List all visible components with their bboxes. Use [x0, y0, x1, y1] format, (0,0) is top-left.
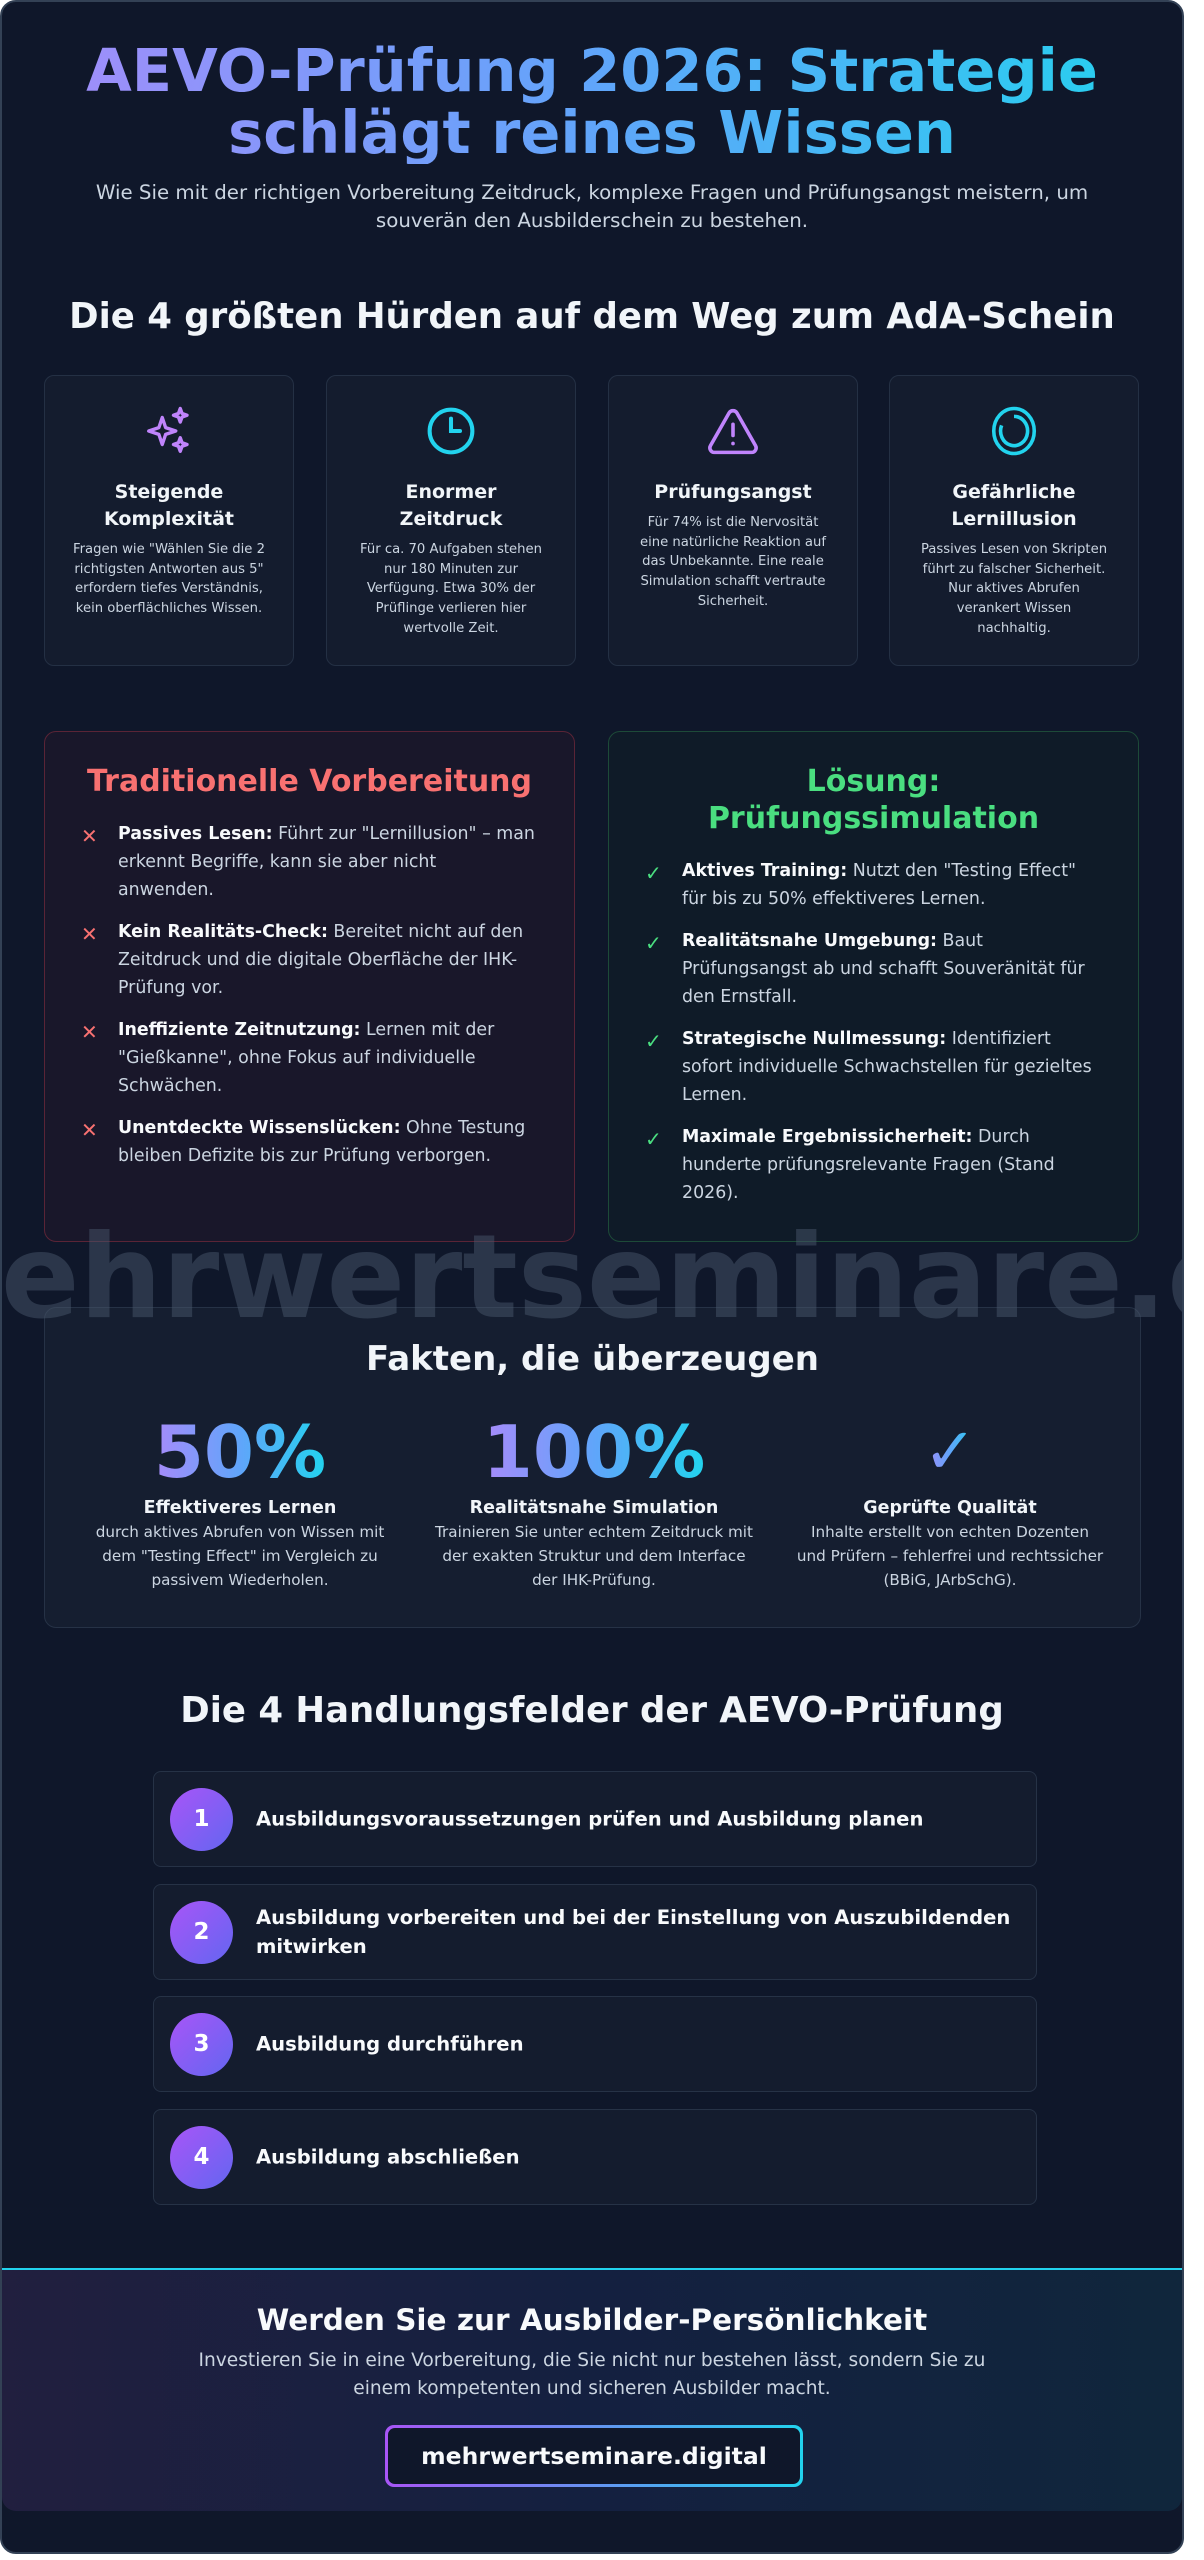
heading: facts: Fakten, die überzeugen	[366, 1339, 819, 1379]
item: passive reading: Passives Lesen: Führt zur "Lernillusion" – man erkennt Begriffe, kann sie aber nicht anwenden.	[118, 824, 535, 900]
fact: 50%: 50%	[154, 1410, 326, 1494]
field 3: Ausbildung durchführen	[256, 2032, 524, 2056]
CTA text: Investieren Sie in eine Vorbereitung, die Sie nicht nur bestehen lässt, sondern Sie zu einem kompetenten und sicheren Ausbilder macht.	[199, 2350, 985, 2399]
card: time pressure: Enormer Zeitdruck	[400, 481, 502, 530]
card: learning illusion	[889, 375, 1139, 666]
heading: traditional: Traditionelle Vorbereitung	[87, 764, 532, 799]
item: realistic environment: Realitätsnahe Umgebung: Baut Prüfungsangst ab und schafft Souveränität für den Ernstfall.	[682, 931, 1085, 1007]
item: inefficient time: Ineffiziente Zeitnutzung: Lernen mit der "Gießkanne", ohne Fokus auf individuelle Schwächen.	[118, 1020, 494, 1096]
subtitle: Wie Sie mit der richtigen Vorbereitung Zeitdruck, komplexe Fragen und Prüfungsangst meistern, um souverän den Ausbilderschein zu bestehen.	[96, 181, 1088, 232]
fact: quality	[797, 1415, 1104, 1589]
panel: solution	[608, 731, 1139, 1242]
heading: hurdles: Die 4 größten Hürden auf dem Weg zum AdA-Schein	[69, 296, 1115, 337]
item: no reality check: ✕	[81, 922, 98, 946]
field 1: Ausbildungsvoraussetzungen prüfen und Ausbildung planen	[256, 1808, 923, 1830]
field 3	[153, 1996, 1037, 2092]
field 4: Ausbildung abschließen	[256, 2146, 520, 2168]
card: learning illusion: Passives Lesen von Skripten führt zu falscher Sicherheit. Nur aktives Abrufen verankert Wissen nachhaltig.	[921, 542, 1107, 636]
field 2: 2	[193, 1919, 210, 1945]
title: AEVO-Prüfung 2026: Strategie	[86, 36, 1098, 105]
card: time pressure	[326, 375, 576, 666]
field 4	[153, 2109, 1037, 2205]
fact: 50%: Effektiveres Lernen	[144, 1498, 336, 1518]
card: learning illusion: Gefährliche Lernillusion	[951, 481, 1077, 530]
fact: 50%	[96, 1410, 384, 1589]
CTA button	[385, 2425, 803, 2487]
field 2	[153, 1884, 1037, 1980]
card: complexity: Steigende Komplexität	[104, 481, 234, 530]
panel: facts	[44, 1307, 1141, 1628]
fact: 100%: 100%	[483, 1410, 705, 1494]
icon: clock	[428, 408, 474, 454]
field 3: 3	[193, 2031, 210, 2057]
field 1	[153, 1771, 1037, 1867]
item: no reality check: Kein Realitäts-Check: Bereitet nicht auf den Zeitdruck und die digitale Oberfläche der IHK-Prüfung vor.	[118, 922, 523, 998]
item: realistic environment: ✓	[645, 931, 662, 955]
card: complexity	[44, 375, 294, 666]
field 4: 4	[193, 2144, 210, 2170]
CTA heading: Werden Sie zur Ausbilder-Persönlichkeit	[257, 2303, 927, 2337]
heading: solution: Prüfungssimulation	[708, 801, 1039, 836]
item: passive reading: ✕	[81, 824, 98, 848]
item: inefficient time: ✕	[81, 1020, 98, 1044]
CTA band	[2, 2268, 1182, 2511]
panel: traditional preparation	[44, 731, 575, 1242]
item: active training: Aktives Training: Nutzt den "Testing Effect" für bis zu 50% effektiveres Lernen.	[682, 861, 1076, 909]
fact: quality: und Prüfern – fehlerfrei und rechtssicher (BBiG, JArbSchG).	[797, 1547, 1103, 1589]
card: complexity: Fragen wie "Wählen Sie die 2 richtigsten Antworten aus 5" erfordern tiefes Verständnis, kein oberflächliches Wissen.	[73, 542, 265, 616]
title: schlägt reines Wissen	[228, 98, 956, 167]
title	[2, 40, 1182, 164]
item: baseline: ✓	[645, 1029, 662, 1053]
card: exam anxiety: Für 74% ist die Nervosität eine natürliche Reaktion auf das Unbekannte. Eine reale Simulation schafft vertraute Sicherheit.	[640, 515, 826, 609]
field 1: 1	[193, 1806, 210, 1832]
item: max certainty: ✓	[645, 1127, 662, 1151]
heading: fields: Die 4 Handlungsfelder der AEVO-Prüfung	[180, 1690, 1004, 1731]
fact: quality: Geprüfte Qualität	[863, 1498, 1037, 1518]
heading: solution: Lösung:	[807, 764, 940, 799]
card: exam anxiety	[608, 375, 858, 666]
item: knowledge gaps: ✕	[81, 1118, 98, 1142]
fact: quality: ✓	[923, 1415, 977, 1489]
icon: warning	[708, 408, 758, 454]
heading: solution	[708, 764, 1039, 836]
item: max certainty: Maximale Ergebnissicherheit: Durch hunderte prüfungsrelevante Fragen (Stand 2026).	[682, 1127, 1055, 1203]
fact: 100%: Realitätsnahe Simulation	[470, 1498, 718, 1518]
item: baseline: Strategische Nullmessung: Identifiziert sofort individuelle Schwachstellen für gezieltes Lernen.	[682, 1029, 1092, 1105]
CTA button: mehrwertseminare.digital	[421, 2442, 767, 2470]
icon: sparkles	[147, 406, 189, 453]
item: active training: ✓	[645, 861, 662, 885]
fact: 100%	[434, 1410, 753, 1589]
card: exam anxiety: Prüfungsangst	[654, 481, 812, 503]
fact: 100%: Trainieren Sie unter echtem Zeitdruck mit der exakten Struktur und dem Interface der IHK-Prüfung.	[435, 1523, 753, 1589]
field 2: Ausbildung vorbereiten und bei der Einstellung von Auszubildenden mitwirken	[256, 1906, 1010, 1958]
icon: loop	[992, 406, 1036, 456]
card: time pressure: Für ca. 70 Aufgaben stehen nur 180 Minuten zur Verfügung. Etwa 30% der Prüflinge verlieren hier wertvolle Zeit.	[360, 542, 542, 636]
item: knowledge gaps: Unentdeckte Wissenslücken: Ohne Testung bleiben Defizite bis zur Prüfung verborgen.	[118, 1118, 525, 1166]
fact: quality: Inhalte erstellt von echten Dozenten	[811, 1523, 1089, 1541]
fact: 50%: durch aktives Abrufen von Wissen mit dem "Testing Effect" im Vergleich zu passivem Wiederholen.	[96, 1523, 384, 1589]
